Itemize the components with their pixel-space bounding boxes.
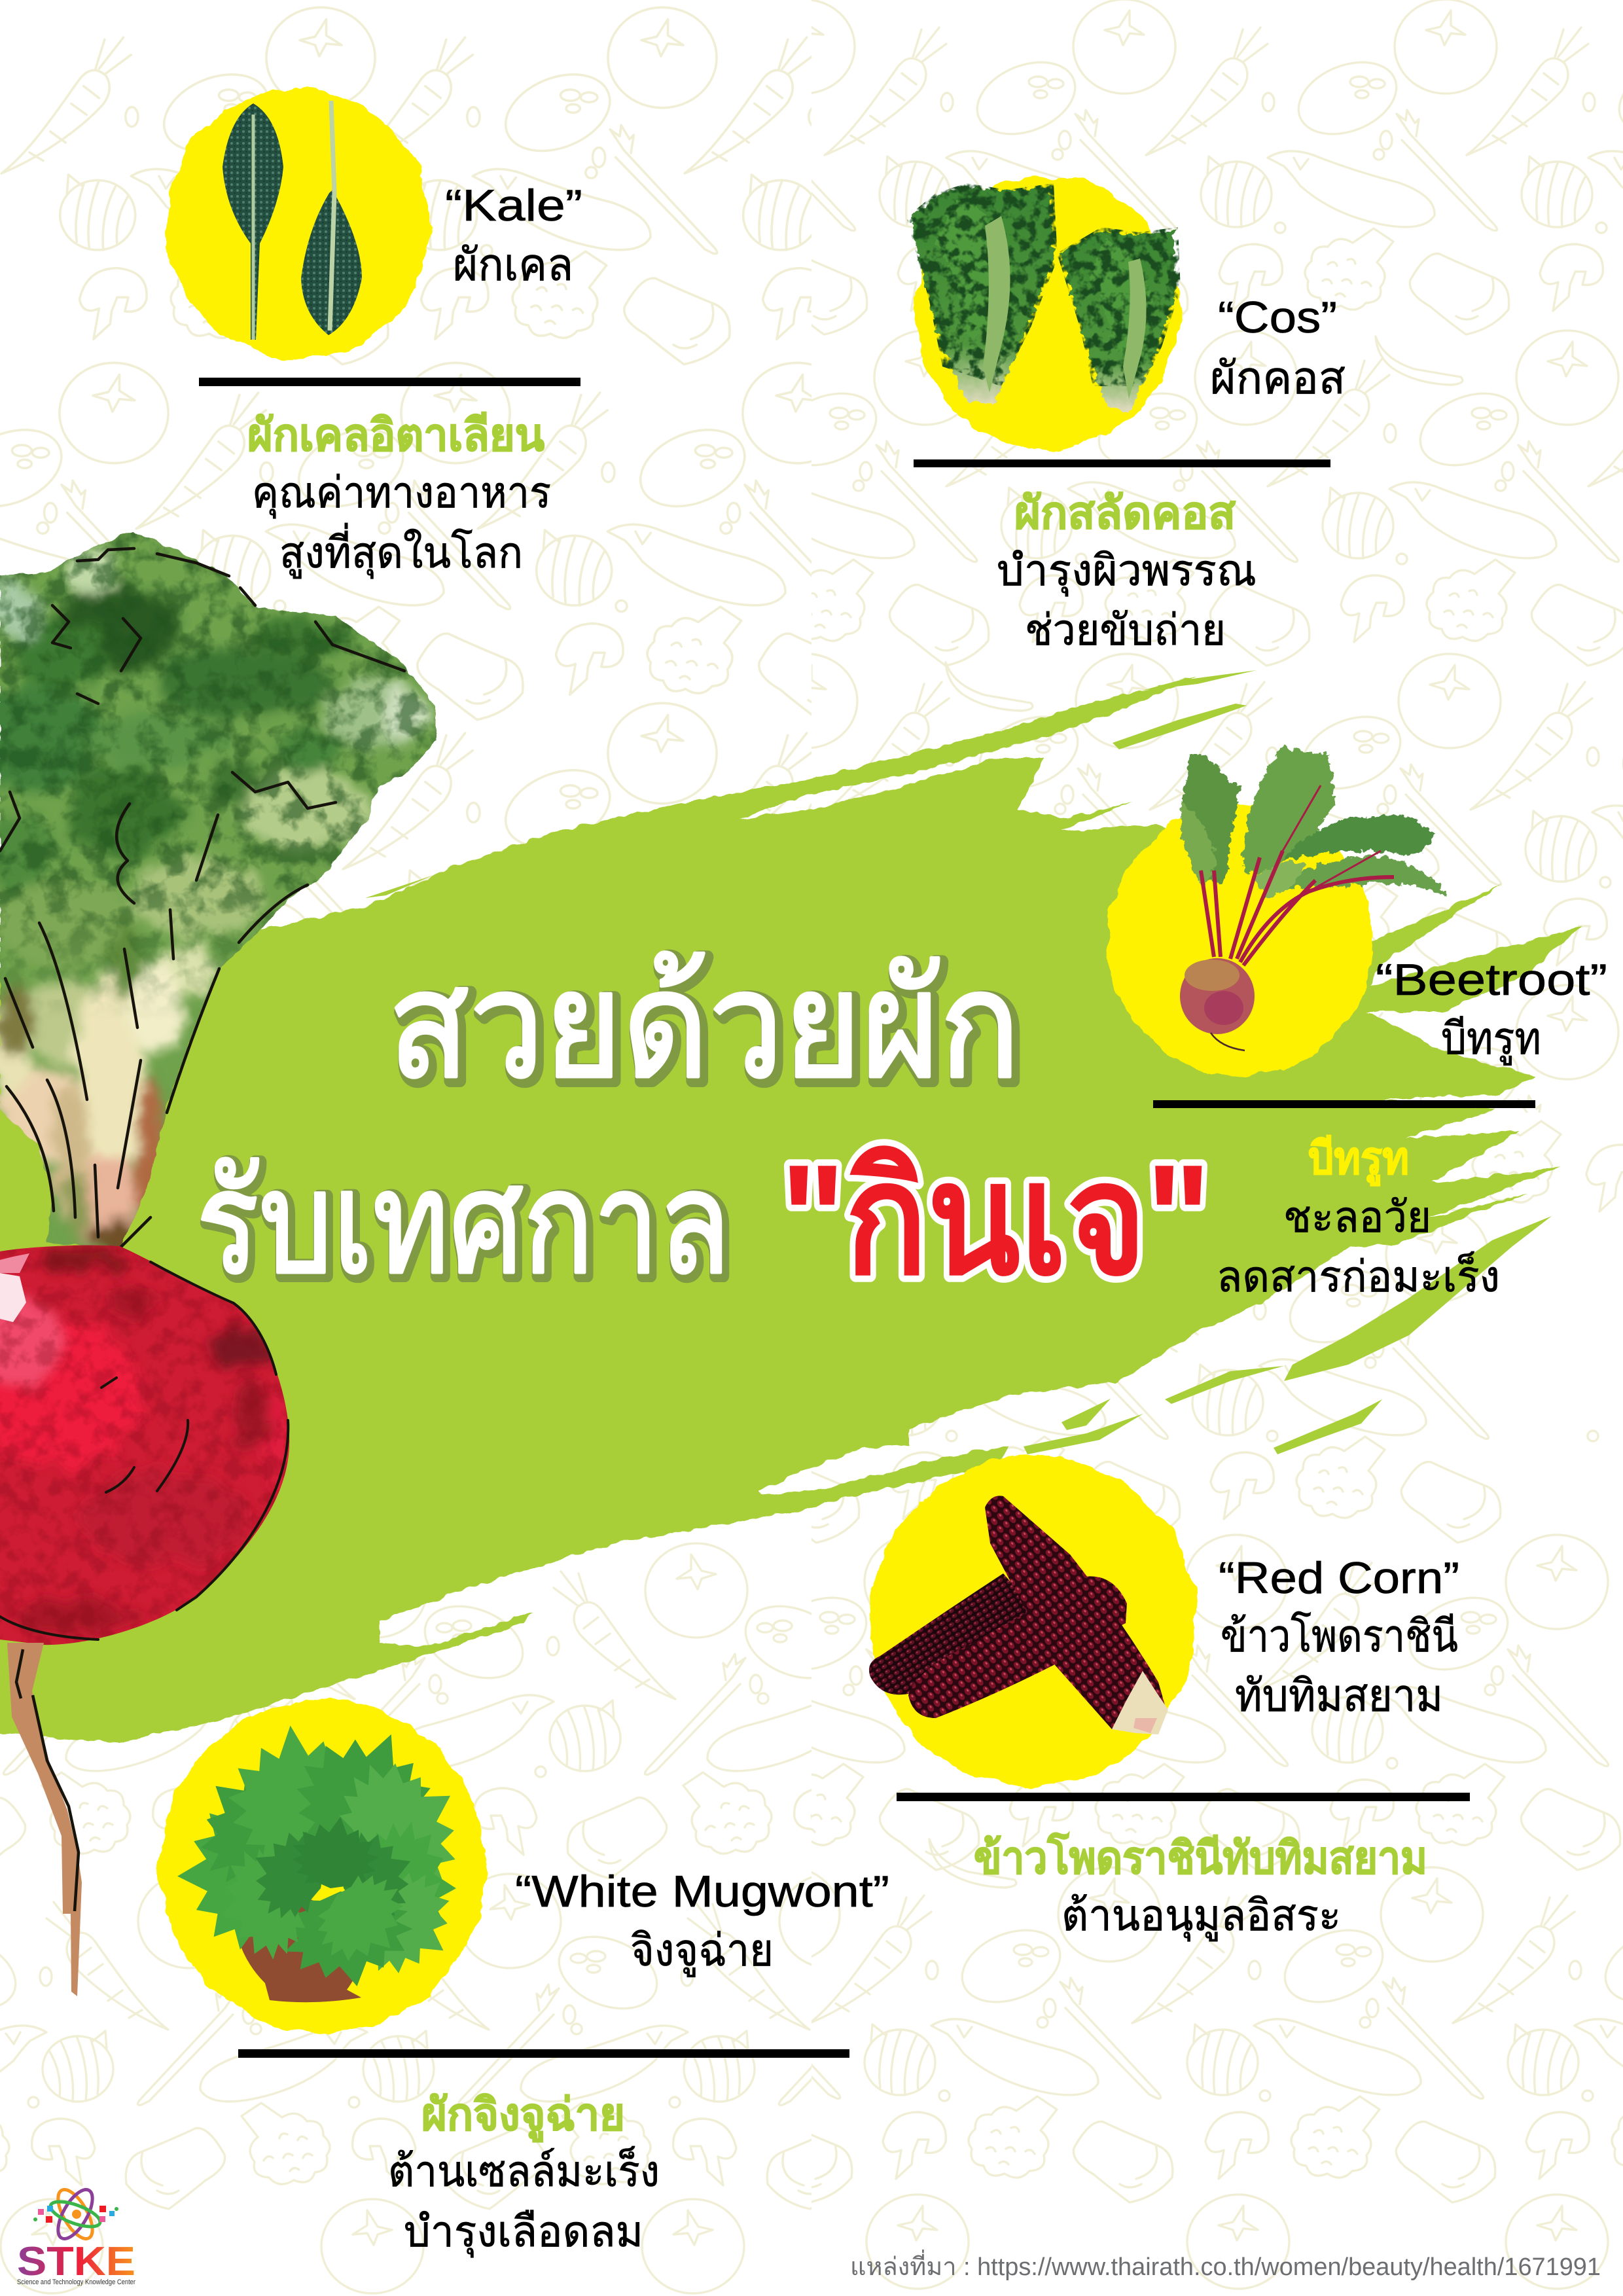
- icon: beetroot plant: [1180, 746, 1448, 1050]
- icon: cos lettuce: [903, 180, 1185, 412]
- panel: white mugwort: [159, 1699, 889, 2258]
- yellow paint circle: [870, 1455, 1196, 1786]
- title: second line: รับเทศกาล: [200, 1147, 734, 1306]
- logo: STKE: [17, 2185, 135, 2286]
- text block: kale benefit: สูงที่สุดในโลก: [279, 523, 523, 579]
- text block: beetroot benefit: [1217, 1193, 1500, 1300]
- text block: cos benefit: บำรุงผิวพรรณ: [997, 546, 1257, 597]
- yellow paint circle: [167, 88, 429, 359]
- text block: beetroot benefit: ชะลอวัย: [1283, 1193, 1431, 1241]
- text block: beetroot benefit: ลดสารก่อมะเร็ง: [1217, 1251, 1500, 1300]
- divider rule: [897, 1793, 1470, 1801]
- label: Cos name: [1210, 293, 1346, 403]
- logo subtitle: Science and Technology Knowledge Center: [17, 2278, 135, 2286]
- divider rule: [199, 378, 580, 386]
- beet body ink outline: [0, 1262, 288, 1640]
- label: White Mugwort name: “White Mugwont”: [515, 1867, 889, 1916]
- title: highlighted word: "กินเจ": [781, 1133, 1211, 1306]
- source credit: แหล่งที่มา : https://www.thairath.co.th/women/beauty/health/1671991: [850, 2250, 1601, 2281]
- panel: beetroot: [1108, 746, 1607, 1300]
- panel: kale: [167, 88, 582, 579]
- yellow paint circle: [159, 1699, 485, 2033]
- label: Red Corn name: ข้าวโพดราชินี: [1221, 1611, 1458, 1661]
- green paint brush stroke: [0, 670, 1582, 1743]
- title: first line: สวยด้วยผัก: [388, 942, 1020, 1109]
- heading: cos salad: ผักสลัดคอส: [1014, 488, 1236, 538]
- label: Beetroot name: บีทรูท: [1441, 1014, 1541, 1066]
- label: Beetroot name: [1376, 955, 1607, 1066]
- panel: red corn: [869, 1455, 1470, 1942]
- text block: cos benefit: ช่วยขับถ่าย: [1025, 605, 1226, 654]
- yellow paint circle: [1108, 805, 1372, 1076]
- label: Kale name: [445, 181, 582, 290]
- yellow paint circle: [915, 176, 1179, 450]
- label: Beetroot name: “Beetroot”: [1376, 955, 1607, 1005]
- text block: mugwort benefit: [388, 2145, 660, 2258]
- icon: kale leaves: [223, 101, 362, 340]
- label: Red Corn name: “Red Corn”: [1219, 1553, 1459, 1603]
- text block: cos benefit: [997, 546, 1257, 654]
- text block: kale benefit: คุณค่าทางอาหาร: [252, 468, 551, 519]
- text block: kale benefit: [252, 468, 551, 579]
- panel: cos lettuce: [903, 176, 1346, 654]
- beet leaf ink lines: [0, 548, 404, 1247]
- heading: Italian kale: ผักเคลอิตาเลียน: [247, 410, 544, 460]
- heading: mugwort: ผักจิงจูฉ่าย: [421, 2090, 625, 2143]
- text block: corn benefit: ต้านอนุมูลอิสระ: [1061, 1891, 1341, 1942]
- heading: red corn: ข้าวโพดราชินีทับทิมสยาม: [974, 1832, 1427, 1883]
- label: Kale name: “Kale”: [445, 181, 582, 230]
- beet root body: [0, 1237, 301, 1656]
- divider rule: [238, 2049, 849, 2058]
- beet leaves: [0, 524, 458, 1257]
- text block: mugwort benefit: บำรุงเลือดลม: [404, 2207, 643, 2258]
- label: White Mugwort name: จิงจูฉ่าย: [630, 1926, 774, 1977]
- heading: beetroot: บีทรูท: [1308, 1134, 1409, 1187]
- logo wordmark: STKE: [17, 2239, 135, 2284]
- brush streaks: [365, 670, 1552, 1454]
- icon: red corn cobs: [869, 1496, 1168, 1734]
- illustration: large watercolor beetroot: [0, 524, 458, 1996]
- label: Red Corn name: [1219, 1553, 1459, 1721]
- divider rule: [1153, 1100, 1535, 1108]
- beet tap root ink line: [16, 1649, 79, 1911]
- title: first line: สวยด้วยผัก: [392, 946, 1024, 1113]
- title: second line: รับเทศกาล: [196, 1144, 730, 1303]
- icon: potted white mugwort: [171, 1708, 487, 2002]
- label: Cos name: “Cos”: [1218, 293, 1337, 342]
- text block: mugwort benefit: ต้านเซลล์มะเร็ง: [388, 2145, 660, 2195]
- beet tap root: [7, 1643, 82, 1996]
- logo emblem: [33, 2185, 118, 2244]
- label: Kale name: ผักเคล: [453, 240, 573, 290]
- label: Red Corn name: ทับทิมสยาม: [1235, 1671, 1443, 1721]
- label: White Mugwort name: [515, 1867, 889, 1977]
- divider rule: [914, 459, 1330, 467]
- label: Cos name: ผักคอส: [1210, 353, 1346, 403]
